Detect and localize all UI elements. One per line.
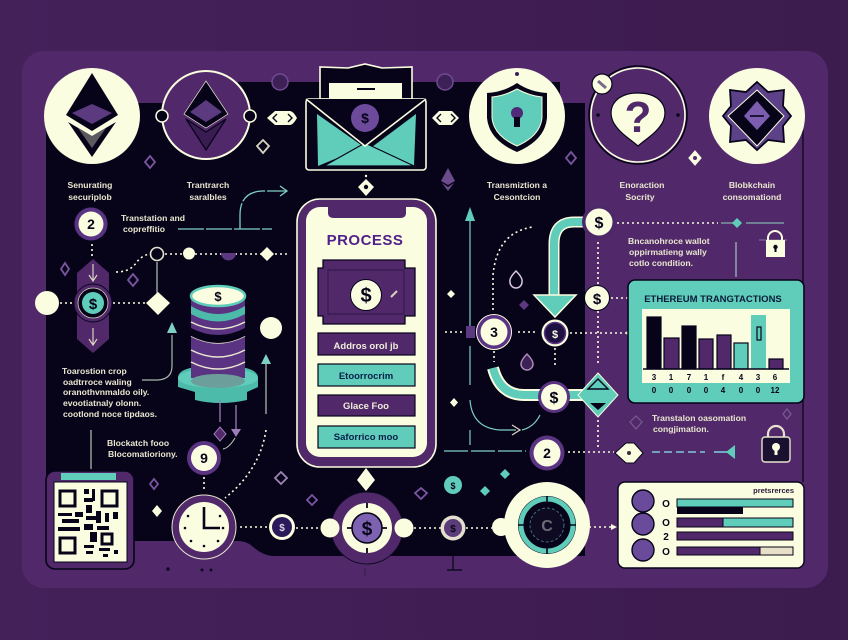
text: encryption label: Enoraction: [620, 180, 664, 190]
decor: teal coin and diamonds: [307, 468, 510, 505]
icon: central medallion: [320, 492, 414, 564]
icon: question circle: ?: [625, 93, 651, 142]
button: address: [318, 333, 415, 355]
icon: target dial: [492, 482, 590, 568]
icon: dollar bill: $: [360, 285, 372, 307]
text: confirmation paragraph: congjimation.: [653, 424, 709, 434]
chart axis numbers: 1: [704, 373, 709, 382]
connector: step 3 row to chart: [570, 326, 641, 340]
icon: small coin right: [440, 516, 466, 540]
step number 2 top left: 2: [87, 216, 95, 232]
decor: drop marks and sparkles: [447, 152, 576, 407]
icon: coin top right of arrow: [582, 205, 616, 239]
bar row 3: [677, 532, 793, 540]
arrow: teal U-turn down: [534, 222, 587, 317]
step number 2 bottom: 2: [543, 445, 551, 461]
row digits: 2: [663, 532, 669, 543]
chart axis numbers: 3: [652, 373, 657, 382]
icon: blockchain star circle: [709, 68, 805, 164]
panel: left timeline purple bar: [77, 259, 109, 353]
chart axis numbers: f: [722, 373, 725, 382]
connector: upper node row: [116, 247, 287, 295]
chart axis numbers: 0: [739, 386, 744, 395]
text: encryption label: Socrity: [625, 192, 655, 202]
decor: teal coin and diamonds: $: [450, 481, 456, 491]
heading: PROCESS: PROCESS: [327, 232, 403, 249]
bar chart: [643, 315, 789, 369]
connector: line to step 2: [444, 450, 526, 452]
chart axis numbers: 0: [652, 386, 657, 395]
connector: coin to chart: [611, 297, 628, 299]
connector: step 3 row: [445, 326, 555, 366]
connector: envelope diamond: [358, 175, 374, 196]
panel: preferences bars: [618, 482, 804, 568]
text: transaction label: Trantrarch: [187, 180, 229, 190]
icon: coin on curve: [538, 381, 570, 413]
text: transaction note: Transtation and: [121, 213, 185, 223]
decor: white sparkle: [152, 505, 162, 517]
row digits: O: [662, 499, 670, 510]
chart axis numbers: 12: [771, 386, 780, 395]
button: confirm: [318, 426, 415, 448]
connector: bottom row: [240, 527, 492, 528]
step number 2 bottom: [530, 436, 564, 470]
icon: timeline coin: $: [89, 296, 98, 313]
connector: dotted curve to step 3: [493, 227, 533, 310]
button: ethereum: Etoorrocrim: [339, 371, 393, 382]
text: wallot paragraph: oppirmatieng wally: [629, 247, 707, 257]
panel: dark central area: [46, 82, 585, 556]
phone notch: [328, 207, 406, 218]
icon: dollar coin small: [584, 286, 610, 310]
text: securing label: securiplob: [68, 192, 112, 202]
row icons: [632, 490, 654, 561]
icon: small coin right: $: [450, 524, 456, 535]
chart axis numbers: 0: [756, 386, 761, 395]
arrow: top left branch: [178, 186, 287, 229]
icon: coin under arrow: $: [552, 329, 558, 341]
step number 9: [187, 441, 221, 475]
chart axis numbers: 6: [773, 373, 778, 382]
icon: ethereum cream circle: [44, 68, 140, 164]
connector: 9 to clock: [203, 477, 205, 492]
icon: small coin left: $: [279, 523, 285, 534]
button: address: Addros oroI jb: [334, 341, 399, 352]
chart axis numbers: 3: [756, 373, 761, 382]
text: transmission label: Cesontcion: [494, 192, 540, 202]
connector: dial to bars: [589, 524, 617, 530]
button: gas fee: [318, 395, 415, 416]
connector: left timeline: [35, 244, 170, 345]
panel: right edge line: [802, 130, 804, 482]
panel title: pretsrerces: [753, 486, 794, 495]
text: confirmation paragraph: Transtalon oasomation: [652, 413, 746, 423]
icon: small coin left: [269, 514, 295, 540]
bar row 1: [677, 499, 793, 514]
connector: right dotted row: [598, 218, 784, 450]
text: blockchain fee note: Blocomatioriony.: [108, 449, 178, 459]
text: wallot paragraph: cotlo condition.: [629, 258, 693, 268]
arrow: teal up line: [465, 207, 475, 385]
text: transaction note: copreffitio: [123, 224, 165, 234]
chart axis numbers: 7: [687, 373, 692, 382]
row digits: O: [662, 547, 670, 558]
text: transaction paragraph: evootiatnaly olonn.: [63, 398, 141, 408]
text: transaction paragraph: cootlond noce tipdaos.: [63, 409, 157, 419]
chart title: ETHEREUM TRANGTACTIONS: [644, 294, 782, 305]
chart axis numbers: 4: [739, 373, 744, 382]
arrows: under coin base: [142, 322, 271, 498]
step number 3: 3: [490, 324, 498, 340]
bar row 2: [677, 518, 793, 527]
icon: stacked coins: $: [214, 289, 222, 304]
decor: footer dots: [166, 556, 462, 576]
panel: phone: [297, 199, 436, 467]
icon: coin on curve: $: [550, 390, 559, 407]
chart axis numbers: 4: [721, 386, 726, 395]
icon: small ethereum: [441, 168, 455, 191]
step number 2 top left: [74, 207, 108, 241]
chart axis numbers: 0: [669, 386, 674, 395]
step number 9: 9: [200, 450, 208, 466]
chart panel: ethereum transactions: [628, 280, 804, 403]
chart axis numbers: 1: [669, 373, 674, 382]
icon: cream node right of coins: [260, 317, 282, 339]
icon: lock top: [759, 231, 787, 257]
icon: stacked coins: [178, 286, 258, 403]
icon: ethereum ring circle: [156, 71, 256, 159]
button: ethereum: [318, 364, 415, 386]
icon: QR code: [46, 471, 134, 569]
decor: left diamonds: [61, 140, 287, 489]
icon: envelope: [306, 64, 426, 170]
button: gas fee: Glace Foo: [343, 401, 389, 412]
text: blockchain fee note: Blockatch fooo: [107, 438, 169, 448]
icon: top small badges: [272, 74, 453, 90]
text: blockchain label: consomationd: [723, 192, 781, 202]
icon: central medallion: $: [362, 519, 373, 540]
chart axis numbers: 0: [704, 386, 709, 395]
icon: target dial: C: [541, 518, 553, 535]
decor: faint diamonds right: [630, 151, 791, 429]
text: wallot paragraph: Bncanohroce wallot: [628, 236, 710, 246]
text: transmission label: Transmiztion a: [487, 180, 547, 190]
icon: coin under arrow: [542, 320, 568, 346]
icon: top hexagon tag right: [432, 111, 459, 125]
connector: eye tag row: [568, 443, 735, 463]
text: transaction label: saralbles: [189, 192, 227, 202]
icon: teal diamond: [578, 373, 618, 417]
icon: padlock: [762, 426, 790, 462]
chart axis numbers: 0: [687, 386, 692, 395]
step number 3: [476, 314, 512, 350]
icon: dollar bill: [318, 260, 415, 324]
text: transaction paragraph: oadtrroce waling: [63, 377, 132, 387]
icon: clock: [172, 495, 236, 559]
row digits: O: [662, 518, 670, 529]
text: transaction paragraph: Toarostion crop: [62, 366, 127, 376]
text: blockchain label: Blobkchain: [729, 180, 775, 190]
bar row 4: [677, 547, 793, 555]
button: confirm: Saforrico moo: [334, 432, 398, 443]
text: transaction paragraph: oranothvnmaldo oily.: [63, 387, 149, 397]
icon: shield circle: [469, 68, 565, 164]
connector: QR vertical: [90, 430, 92, 469]
icon: coin top right of arrow: $: [595, 215, 604, 232]
icon: envelope: $: [361, 110, 369, 126]
icon: timeline coin: [74, 284, 112, 322]
icon: dollar coin small: $: [593, 291, 602, 308]
icon: top hexagon tag left: [267, 111, 297, 125]
panel: main purple card: [22, 51, 828, 588]
arrow: teal lower curve: [493, 368, 585, 395]
icon: question circle: [589, 66, 687, 164]
arrow: dashed curve below: [470, 400, 540, 445]
text: securing label: Senurating: [68, 180, 112, 190]
